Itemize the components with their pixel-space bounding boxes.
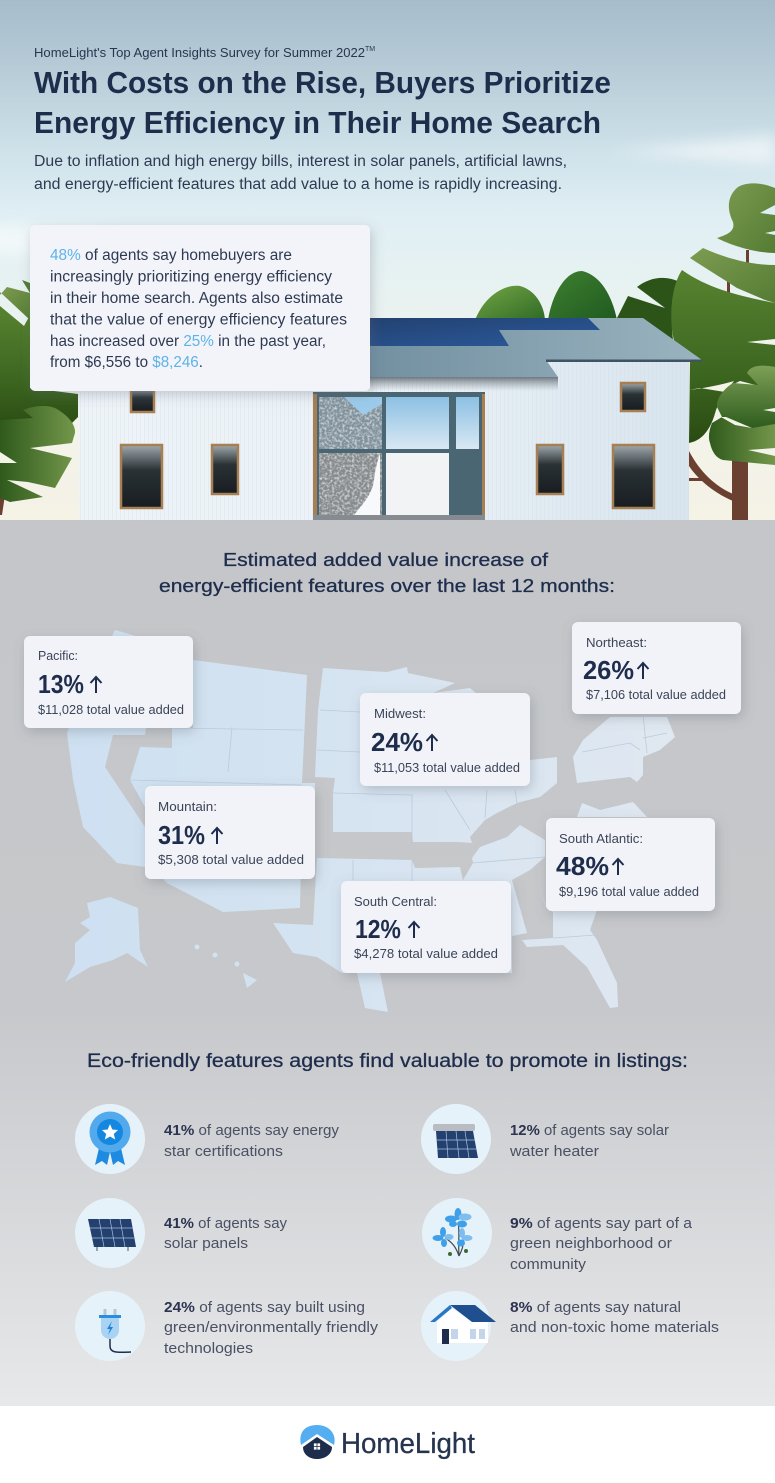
card: Midwest [360,693,530,786]
card: South Atlantic [546,818,715,911]
Midwest states [315,667,557,843]
feature: energy star certifications: 41% of agents say energy [164,1123,340,1139]
card: Midwest: Midwest: [374,707,426,721]
background bushes [475,271,617,320]
card: South Central: South Central: [354,895,437,909]
card: Mountain: $5,308 total value added [158,853,304,867]
feature: green technologies: 24% of agents say built using [164,1300,365,1316]
feature: solar panels: solar panels [164,1236,248,1252]
feature: solar water heater [421,1104,669,1174]
trademark: TM [365,46,375,53]
callout card [30,225,370,391]
card: Pacific: 13% [38,669,84,699]
house walls [79,362,689,520]
card: Northeast: 26% [583,655,634,685]
survey label: HomeLight's Top Agent Insights Survey for Summer 2022 [34,45,365,60]
card: South Atlantic: South Atlantic: [559,832,643,846]
intro text: and energy-efficient features that add value to a home is rapidly increasing. [34,176,562,193]
Hawaii [194,944,257,988]
map heading: Estimated added value increase of [223,549,549,570]
feature: green neighborhood [422,1198,693,1273]
card: Midwest: $11,053 total value added [374,761,520,775]
title: Energy Efficiency in Their Home Search [34,105,601,140]
card: South Central: 12% [355,914,401,944]
card: South Atlantic: $9,196 total value added [559,885,699,899]
footer [0,1406,775,1483]
card: South Atlantic: 48% [556,851,609,881]
card: South Central [341,881,511,973]
map heading: energy-efficient features over the last 12 months: [159,575,615,596]
callout card: increasingly prioritizing energy efficiency [50,268,332,286]
solar roof panel [340,318,600,346]
feature: green neighborhood: green neighborhood or [510,1236,672,1252]
hero sky background [0,0,775,520]
map heading [159,549,615,596]
house illustration [79,318,702,520]
callout card: that the value of energy efficiency features [50,312,347,328]
Northeast states [573,717,675,783]
features heading: Eco-friendly features agents find valuable to promote in listings: [87,1050,688,1072]
Alaska [65,897,148,982]
callout card: from $6,556 to $8,246. [50,354,203,371]
card: Mountain: Mountain: [158,800,217,814]
card: Mountain [145,786,315,879]
feature: green neighborhood: 9% of agents say part of a [510,1216,693,1232]
feature: green neighborhood: community [510,1257,587,1273]
card: Pacific: Pacific: [38,649,78,663]
card: Pacific [24,636,193,728]
Mountain states [130,660,315,912]
clouds [0,135,775,254]
intro text: Due to inflation and high energy bills, interest in solar panels, artificial lawns, [34,153,567,170]
callout card: in their home search. Agents also estimate [50,290,343,307]
right tree [616,183,775,520]
callout card: has increased over 25% in the past year, [50,333,326,350]
feature: solar panels [75,1198,288,1268]
feature: solar water heater: 12% of agents say solar [510,1123,669,1139]
callout card: 48% of agents say homebuyers are [50,247,292,264]
grey section background [0,520,775,1406]
wall shading under roof [370,377,558,391]
card: Northeast: $7,106 total value added [586,688,726,702]
left tree [0,280,78,515]
feature: green technologies: technologies [164,1341,253,1357]
South Atlantic states [577,802,647,817]
feature: natural materials: and non-toxic home materials [510,1320,719,1336]
main window [313,392,485,520]
feature: green technologies: green/environmentally friendly [164,1320,379,1336]
card: Northeast [572,622,741,714]
US map [65,630,675,1012]
intro text [34,153,567,193]
Pacific states [67,630,150,867]
HomeLight logo: HomeLight [341,1428,475,1460]
card: Pacific: $11,028 total value added [38,703,184,717]
title: With Costs on the Rise, Buyers Prioritize [34,65,611,100]
card: South Central: $4,278 total value added [354,947,498,961]
feature: natural materials: 8% of agents say natural [510,1300,681,1316]
grey roof [340,318,702,377]
feature: energy star certifications [75,1104,340,1174]
feature: energy star certifications: star certifications [164,1144,283,1160]
HomeLight logo [300,1425,475,1460]
small windows [121,383,654,508]
feature: green technologies [75,1291,379,1361]
card: Midwest: 24% [371,727,423,757]
card: Mountain: 31% [158,820,205,850]
feature: solar water heater: water heater [509,1144,599,1160]
feature: solar panels: 41% of agents say [164,1216,288,1232]
South Central states [273,858,527,1012]
title [34,65,611,140]
card: Northeast: Northeast: [586,636,647,650]
feature: natural materials [421,1291,719,1361]
